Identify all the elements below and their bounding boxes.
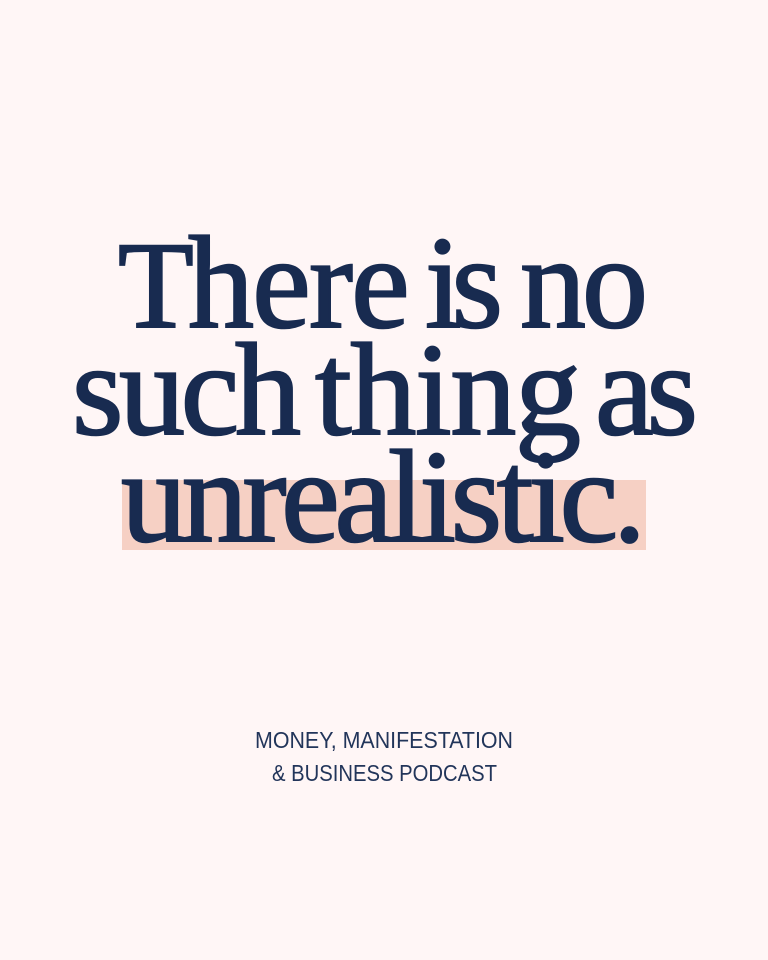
title: here — [188, 209, 408, 356]
tagline: MONEY, MANIFESTATION — [255, 727, 513, 753]
title — [72, 209, 698, 570]
title: T — [118, 217, 194, 354]
tagline: & BUSINESS PODCAST — [272, 760, 497, 786]
title: such — [72, 316, 301, 463]
highlight behind the word unrealistic — [122, 480, 646, 550]
title: is — [425, 209, 503, 356]
title: as — [595, 316, 698, 463]
tagline — [255, 727, 513, 786]
title: no — [520, 209, 648, 356]
title: thing — [315, 316, 581, 463]
title: unrealistic. — [121, 423, 646, 570]
